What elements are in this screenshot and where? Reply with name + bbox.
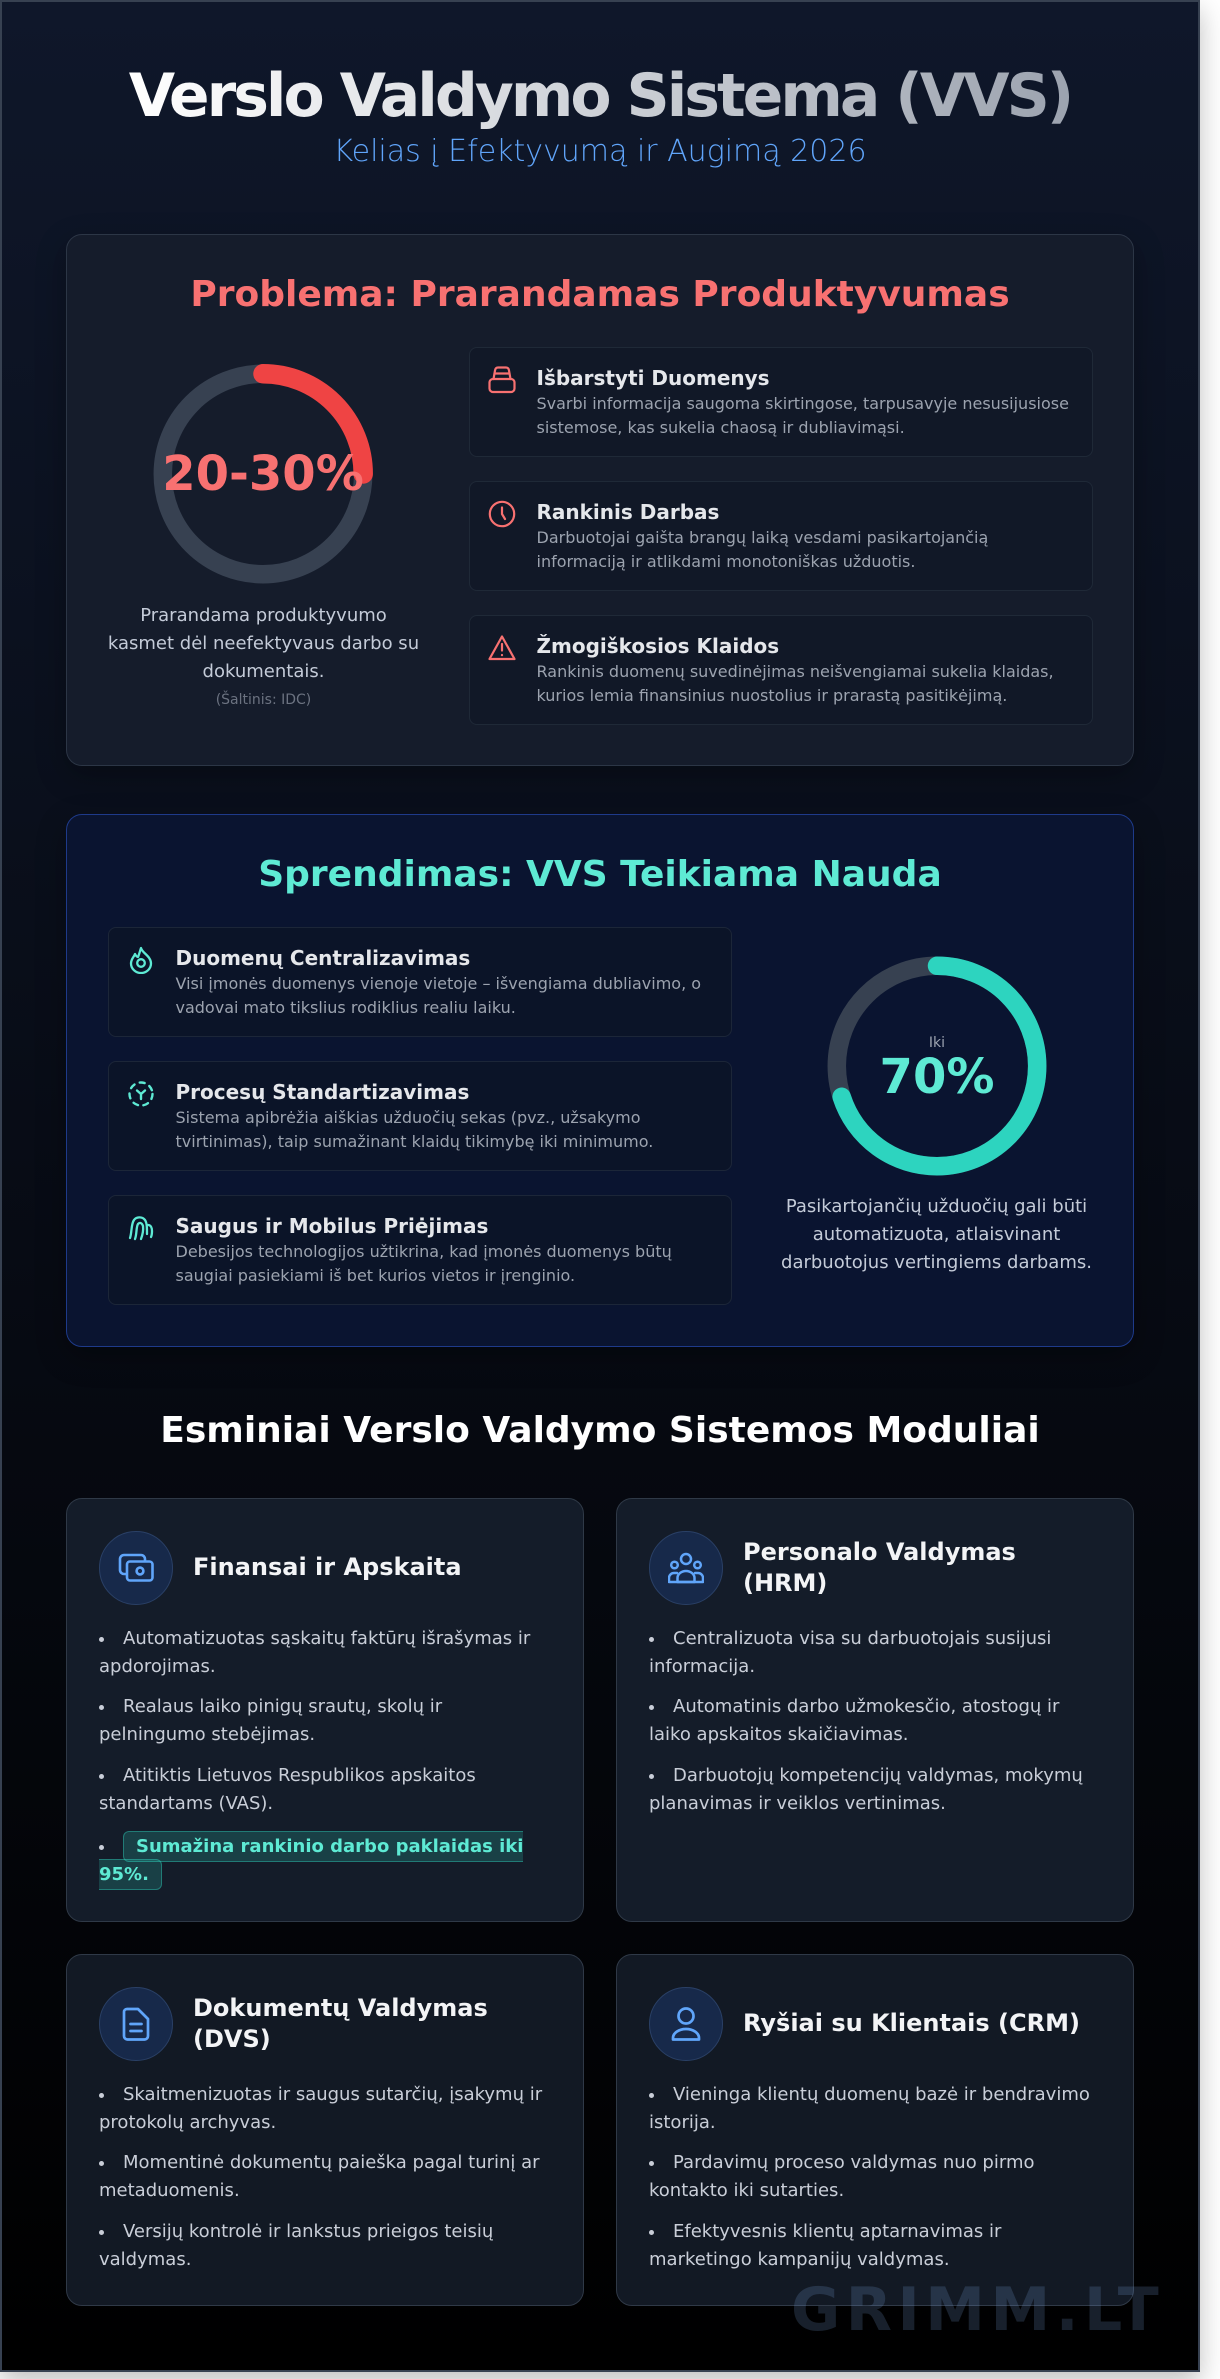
panel: solution [66, 814, 1134, 1347]
module card: documents: Dokumentų Valdymas (DVS) [193, 1994, 488, 2053]
card: human errors: Rankinis duomenų suvedinėjimas neišvengiamai sukelia klaidas, [536, 662, 1054, 681]
card: centralisation: Visi įmonės duomenys vienoje vietoje – išvengiama dubliavimo, o [176, 974, 701, 993]
card: secure access: saugiai pasiekiami iš bet kurios vietos ir įrenginio. [176, 1266, 575, 1285]
card: scattered data: Svarbi informacija saugoma skirtingose, tarpusavyje nesusijusiose [536, 394, 1069, 413]
card: scattered data: Išbarstyti Duomenys [536, 366, 770, 390]
HRM bullet list: Automatinis darbo užmokesčio, atostogų ir laiko apskaitos skaičiavimas. [649, 1696, 1059, 1745]
card: human errors: kurios lemia finansinius nuostolius ir prarastą pasitikėjimą. [536, 686, 1007, 705]
module card: HRM: Personalo Valdymas (HRM) [743, 1538, 1016, 1597]
card: manual work: Rankinis Darbas [536, 500, 719, 524]
CRM bullet list: Vieninga klientų duomenų bazė ir bendravimo istorija. [649, 2084, 1090, 2133]
card: centralisation [108, 927, 732, 1037]
problem stat caption: dokumentais. [203, 661, 324, 682]
card: human errors: Žmogiškosios Klaidos [536, 634, 779, 658]
problem heading: Problema: Prarandamas Produktyvumas [190, 274, 1010, 315]
HRM bullet list: Darbuotojų kompetencijų valdymas, mokymų planavimas ir veiklos vertinimas. [649, 1765, 1083, 1814]
section heading: modules: Esminiai Verslo Valdymo Sistemos Moduliai [160, 1410, 1040, 1451]
module card: finance: Finansai ir Apskaita [193, 1553, 462, 1581]
card: human errors [468, 615, 1092, 725]
card: centralisation: Duomenų Centralizavimas [176, 946, 470, 970]
documents bullet list [99, 2084, 542, 2270]
card: secure access: Saugus ir Mobilus Priėjimas [176, 1214, 488, 1238]
finance bullet list: Automatizuotas sąskaitų faktūrų išrašymas ir apdorojimas. [99, 1628, 530, 1677]
card: manual work [468, 481, 1092, 591]
donut chart: 70%: 70% [880, 1049, 994, 1105]
module card: HRM [616, 1498, 1134, 1922]
solution stat caption: Pasikartojančių užduočių gali būti [786, 1196, 1087, 1217]
problem stat caption: Prarandama produktyvumo [140, 605, 387, 626]
donut chart: 70%: Iki [929, 1035, 945, 1051]
donut chart: 20-30%: 20-30% [162, 446, 364, 502]
finance bullet list: Realaus laiko pinigų srautų, skolų ir pelningumo stebėjimas. [99, 1696, 442, 1745]
HRM bullet list [649, 1628, 1083, 1814]
finance bullet list: Atitiktis Lietuvos Respublikos apskaitos standartams (VAS). [99, 1765, 476, 1814]
documents bullet list: Skaitmenizuotas ir saugus sutarčių, įsakymų ir protokolų archyvas. [99, 2084, 542, 2133]
finance bullet list: Sumažina rankinio darbo paklaidas iki 95%. [99, 1836, 523, 1885]
CRM bullet list: Efektyvesnis klientų aptarnavimas ir marketingo kampanijų valdymas. [649, 2221, 1001, 2270]
CRM bullet list [649, 2084, 1090, 2270]
card: secure access: Debesijos technologijos užtikrina, kad įmonės duomenys būtų [176, 1242, 672, 1261]
HRM bullet list: Centralizuota visa su darbuotojais susijusi informacija. [649, 1628, 1051, 1677]
card: scattered data: sistemose, kas sukelia chaosą ir dubliavimąsi. [536, 418, 905, 437]
donut chart: 20-30% [154, 364, 373, 584]
problem stat caption [108, 605, 419, 682]
module card: finance [66, 1498, 584, 1922]
card: standardisation: tvirtinimas), taip sumažinant klaidų tikimybę iki minimumo. [176, 1132, 653, 1151]
card: manual work: Darbuotojai gaišta brangų laiką vesdami pasikartojančią [536, 528, 988, 547]
card: standardisation: Sistema apibrėžia aiškias užduočių sekas (pvz., užsakymo [176, 1108, 640, 1127]
donut chart: 70% [828, 956, 1046, 1176]
documents bullet list: Versijų kontrolė ir lankstus prieigos teisių valdymas. [99, 2221, 493, 2270]
icon: document [99, 1987, 173, 2061]
icon: warning [488, 635, 516, 660]
card: scattered data [468, 347, 1092, 457]
icon: dashed cycle [128, 1081, 154, 1106]
card: standardisation [108, 1061, 732, 1171]
module card: documents [66, 1954, 584, 2306]
title: Verslo Valdymo Sistema (VVS) [129, 61, 1071, 131]
panel: problem [66, 234, 1134, 766]
card: manual work: informaciją ir atlikdami monotoniškas užduotis. [536, 552, 915, 571]
icon: user [649, 1987, 723, 2061]
module card: CRM: Ryšiai su Klientais (CRM) [743, 2009, 1080, 2037]
CRM bullet list: Pardavimų proceso valdymas nuo pirmo kontakto iki sutarties. [649, 2152, 1034, 2201]
solution stat caption [781, 1196, 1092, 1273]
icon: money [99, 1531, 173, 1605]
icon: drop [130, 946, 152, 974]
card: standardisation: Procesų Standartizavimas [176, 1080, 469, 1104]
source note: (Šaltinis: IDC) [216, 692, 311, 708]
finance bullet list [99, 1628, 530, 1890]
watermark: GRIMM.LT [791, 2275, 1164, 2345]
documents bullet list: Momentinė dokumentų paieška pagal turinį ar metaduomenis. [99, 2152, 540, 2201]
module card: CRM [616, 1954, 1134, 2306]
solution heading: Sprendimas: VVS Teikiama Nauda [258, 854, 942, 895]
card: secure access [108, 1195, 732, 1305]
card: centralisation: vadovai mato tikslius rodiklius realiu laiku. [176, 998, 516, 1017]
solution stat caption: automatizuota, atlaisvinant [813, 1224, 1060, 1245]
subtitle: Kelias į Efektyvumą ir Augimą 2026 [333, 134, 867, 169]
problem stat caption: kasmet dėl neefektyvaus darbo su [108, 633, 419, 654]
icon: users [649, 1531, 723, 1605]
icon: archive [488, 366, 516, 394]
icon: fingerprint [128, 1216, 154, 1240]
solution stat caption: darbuotojus vertingiems darbams. [781, 1252, 1092, 1273]
icon: clock [488, 500, 516, 528]
